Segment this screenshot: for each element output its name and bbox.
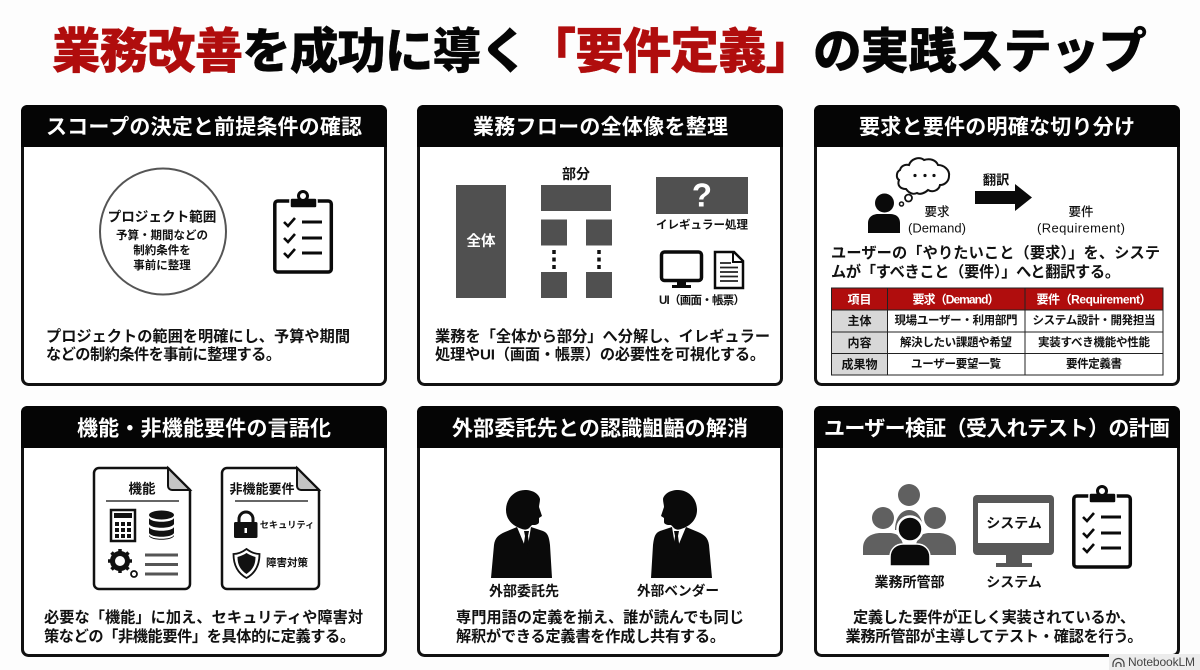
panel header bar	[814, 105, 1180, 147]
icon: system monitor: システム	[986, 515, 1042, 531]
comparison table: 要件（Requirement）	[1036, 292, 1152, 306]
arrow: translation: 翻訳	[983, 172, 1010, 188]
panel frame	[816, 106, 1178, 384]
comparison table: 現場ユーザー・利用部門	[894, 313, 1018, 327]
icon: clipboard	[275, 192, 331, 272]
icon: document	[715, 252, 743, 288]
person labels: 外部ベンダー	[637, 582, 719, 598]
group label: 業務所管部	[874, 574, 944, 590]
description	[831, 244, 1160, 281]
document: non-functional: 非機能要件	[229, 482, 295, 496]
comparison table: 要求（Demand）	[912, 292, 1000, 306]
comparison table: 項目	[847, 292, 872, 306]
requirement label: 要件	[1068, 205, 1094, 219]
description	[44, 608, 363, 646]
project scope circle: 予算・期間などの	[116, 228, 208, 242]
panel: external vendor	[417, 406, 783, 656]
whole block: 全体	[466, 232, 496, 250]
irregular process block	[656, 176, 748, 232]
heading: 外部委託先との認識齟齬の解消	[452, 418, 748, 440]
heading: スコープの決定と前提条件の確認	[46, 116, 362, 139]
arrow: translation	[975, 172, 1032, 211]
project scope circle	[100, 168, 226, 294]
document: non-functional	[222, 468, 319, 589]
irregular process block: ?	[692, 176, 712, 214]
requirement label: (Requirement)	[1037, 220, 1125, 236]
panel header bar	[814, 406, 1180, 448]
description: プロジェクトの範囲を明確にし、予算や期間	[46, 328, 350, 346]
comparison table: ユーザー要望一覧	[911, 356, 1002, 370]
project scope circle: プロジェクト範囲	[108, 208, 216, 224]
document: functional	[94, 468, 190, 589]
demand label: (Demand)	[908, 220, 966, 236]
panel: demand vs requirement	[814, 105, 1180, 384]
watermark: NotebookLM	[1109, 654, 1200, 670]
icon: calculator	[111, 510, 135, 541]
project scope circle: 事前に整理	[133, 258, 191, 272]
panel frame	[418, 106, 782, 384]
heading: ユーザー検証（受入れテスト）の計画	[824, 418, 1170, 440]
title: 業務改善を成功に導く「要件定義」の実践ステップ	[52, 24, 1147, 79]
demand label	[908, 204, 966, 236]
panel header bar	[21, 105, 387, 147]
watermark: NotebookLM: NotebookLM	[1128, 655, 1195, 669]
description: 業務所管部が主導してテスト・確認を行う。	[846, 628, 1142, 646]
comparison table: 内容	[847, 335, 872, 350]
description	[456, 608, 744, 646]
UI label: UI（画面・帳票）	[659, 293, 745, 307]
icon: monitor	[662, 252, 702, 288]
description: 処理やUI（画面・帳票）の必要性を可視化する。	[435, 346, 765, 364]
irregular process block: イレギュラー処理	[656, 218, 748, 232]
panel: scope	[21, 105, 387, 384]
person labels: 外部委託先	[489, 583, 559, 599]
icon: businessman right	[651, 490, 712, 578]
person labels	[489, 582, 719, 599]
icon: system monitor	[973, 495, 1054, 567]
document: non-functional: 障害対策	[266, 556, 308, 569]
comparison table: 成果物	[841, 356, 878, 372]
panel: functional requirements	[21, 406, 387, 656]
parts diagram	[541, 166, 612, 298]
description	[46, 328, 350, 364]
project scope circle: 制約条件を	[133, 243, 191, 257]
icon: clipboard	[1074, 486, 1130, 567]
icon: database	[149, 510, 174, 540]
document: functional: 機能	[128, 480, 156, 496]
panel frame	[22, 408, 386, 656]
description: 定義した要件が正しく実装されているか、	[853, 608, 1135, 626]
icon: shield	[234, 549, 260, 578]
system label: システム	[986, 574, 1042, 590]
panel frame	[22, 106, 386, 384]
description: ムが「すべきこと（要件）」へと翻訳する。	[831, 263, 1120, 281]
document: non-functional: セキュリティ	[260, 520, 314, 530]
panel header bar	[21, 406, 387, 448]
description: 解釈ができる定義書を作成し共有する。	[456, 628, 725, 646]
icon: businessman left	[491, 490, 552, 578]
heading: 機能・非機能要件の言語化	[77, 418, 331, 440]
comparison table: 主体	[847, 313, 872, 328]
comparison table: 実装すべき機能や性能	[1038, 335, 1150, 349]
comparison table: 要件定義書	[1066, 356, 1122, 370]
panel frame	[816, 408, 1178, 656]
requirement label	[1037, 205, 1125, 236]
panel frame	[418, 408, 782, 656]
panel: business flow	[417, 105, 783, 384]
whole block	[456, 185, 506, 298]
description	[846, 608, 1142, 646]
comparison table: 解決したい課題や希望	[900, 335, 1012, 349]
panel header bar	[417, 406, 783, 448]
description: 策などの「非機能要件」を具体的に定義する。	[44, 628, 355, 646]
icon: padlock	[234, 512, 258, 538]
description: 専門用語の定義を揃え、誰が読んでも同じ	[456, 608, 744, 626]
icon: gears	[108, 549, 137, 577]
panel header bar	[417, 105, 783, 147]
icon: user with thought bubble	[868, 158, 949, 233]
demand label: 要求	[924, 204, 950, 219]
panel: user acceptance test	[814, 406, 1180, 656]
description: 業務を「全体から部分」へ分解し、イレギュラー	[435, 328, 770, 346]
description: などの制約条件を事前に整理する。	[46, 346, 281, 364]
icon: user group	[863, 484, 956, 566]
description	[435, 328, 770, 364]
description: ユーザーの「やりたいこと（要求）」を、システ	[831, 244, 1160, 262]
comparison table: システム設計・開発担当	[1032, 313, 1156, 327]
comparison table	[832, 288, 1163, 375]
description: 必要な「機能」に加え、セキュリティや障害対	[44, 608, 363, 626]
parts diagram: 部分	[562, 166, 590, 182]
heading: 業務フローの全体像を整理	[473, 116, 728, 139]
heading: 要求と要件の明確な切り分け	[859, 116, 1135, 139]
